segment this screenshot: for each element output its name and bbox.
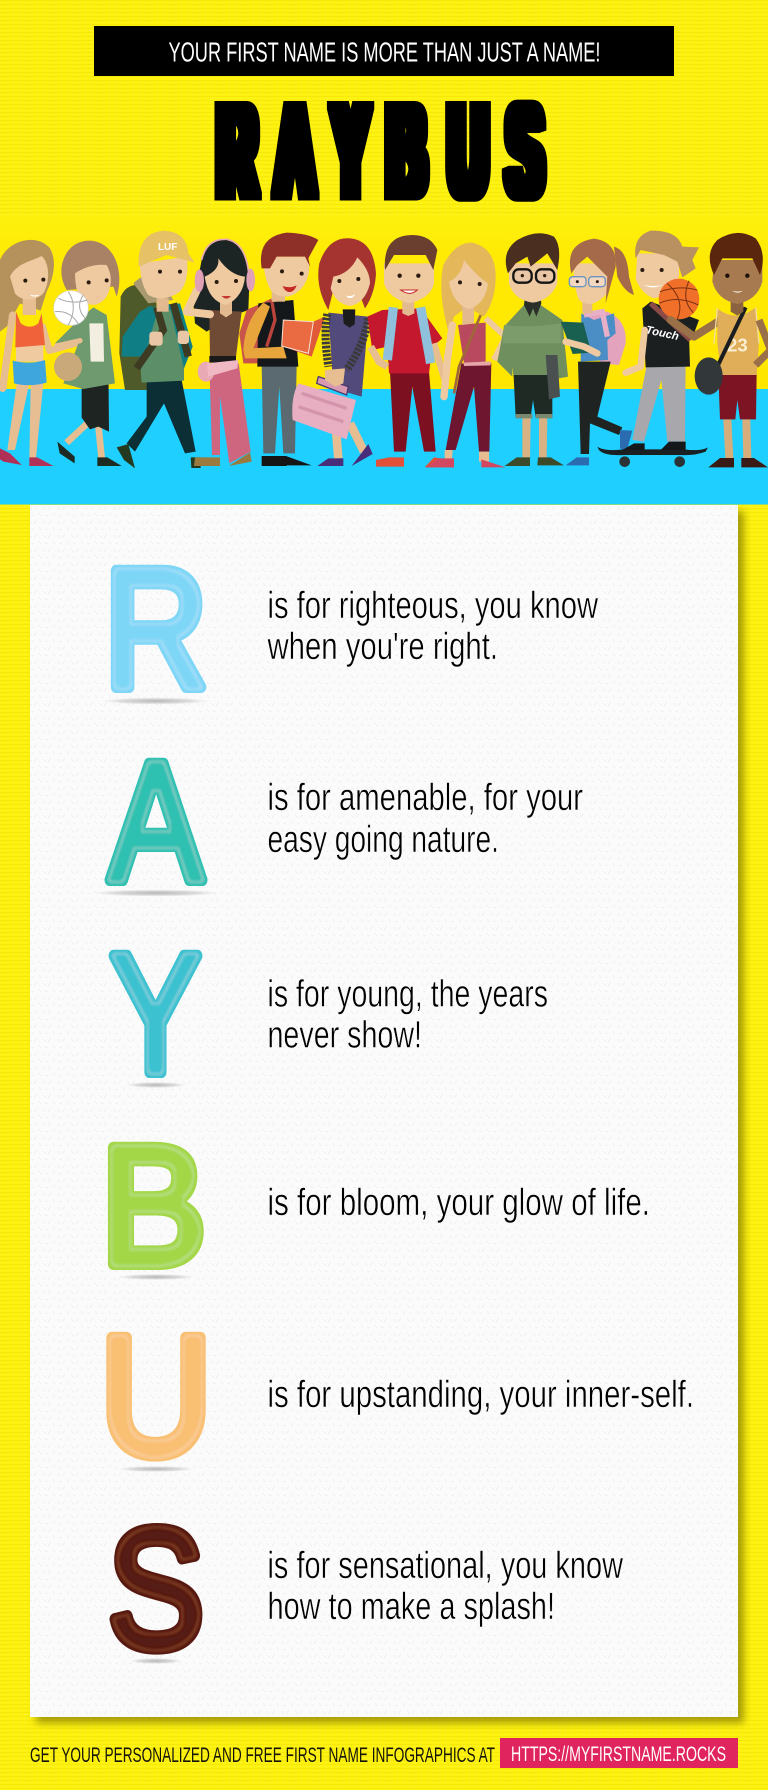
icon: glossy letter R: R — [104, 535, 208, 724]
person 3: hiker with backpack and cap — [117, 231, 201, 468]
text: S meaning — [268, 1545, 623, 1628]
title: RAYBUS: RAYBUS — [218, 77, 542, 225]
icon: glossy letter U: U — [100, 1302, 212, 1490]
text: S meaning: how to make a splash! — [268, 1586, 555, 1628]
row A — [92, 727, 583, 916]
illustration: group of twelve young people — [0, 231, 768, 468]
yellow band behind the people — [0, 215, 768, 389]
person 9: boy with glasses — [497, 233, 568, 466]
letter shadow S — [130, 1658, 182, 1664]
text: A meaning — [268, 777, 583, 861]
letter shadow Y — [126, 1082, 186, 1088]
person 1: girl in orange top — [0, 240, 78, 466]
text: R meaning: is for righteous, you know — [268, 585, 598, 627]
person 8: blond girl — [426, 243, 506, 467]
row U — [100, 1302, 694, 1490]
person 11: skater with basketball: Touch — [645, 324, 680, 343]
row S — [108, 1495, 623, 1684]
text: A meaning: easy going nature. — [268, 819, 499, 861]
person 2: girl with volleyball — [54, 241, 122, 466]
letter shadow U — [118, 1466, 194, 1472]
footer: call to action: GET YOUR PERSONALIZED AND FREE FIRST NAME INFOGRAPHICS AT — [30, 1744, 495, 1767]
left half is drawn in 3x coordinates — [0, 231, 376, 468]
icon: glossy letter S: S — [108, 1495, 204, 1684]
person 6: girl with pink suitcase — [292, 238, 376, 466]
panel: name meanings — [30, 505, 738, 1717]
icon: glossy letter Y: Y — [110, 920, 201, 1108]
person 12: boy in yellow tank with bag — [671, 233, 768, 467]
icon: glossy letter B: B — [101, 1111, 206, 1300]
footer: url badge — [500, 1738, 738, 1768]
person 10: girl with ponytail and tablet — [561, 239, 634, 465]
text: A meaning: is for amenable, for your — [268, 777, 583, 819]
text: Y meaning — [268, 974, 548, 1056]
letter shadow B — [118, 1274, 194, 1280]
text: S meaning: is for sensational, you know — [268, 1545, 623, 1587]
person 3: hiker with backpack and cap: LUF — [158, 242, 177, 253]
icon: glossy letter A: A — [109, 727, 203, 916]
right half is drawn in 3x coordinates — [367, 231, 768, 467]
row Y — [110, 920, 548, 1108]
row B — [101, 1111, 650, 1300]
letter shadow A — [92, 890, 220, 896]
person 5: boy with book — [239, 233, 325, 466]
panel shadow — [36, 511, 744, 1723]
text: Y meaning: never show! — [268, 1014, 422, 1056]
banner: tagline — [94, 26, 674, 76]
text: R meaning — [267, 585, 598, 668]
person 12: boy in yellow tank with bag: 23 — [727, 335, 748, 356]
text: B meaning: is for bloom, your glow of life. — [268, 1182, 650, 1224]
row R — [102, 535, 598, 724]
text: R meaning: when you're right. — [267, 626, 498, 668]
letter shadow R — [102, 698, 210, 704]
cyan floor band — [0, 389, 768, 504]
text: Y meaning: is for young, the years — [268, 974, 548, 1016]
person 11: skater with basketball — [597, 231, 708, 467]
person 4: girl with headphones — [187, 239, 255, 466]
person 7: boy in red tee — [367, 235, 454, 467]
